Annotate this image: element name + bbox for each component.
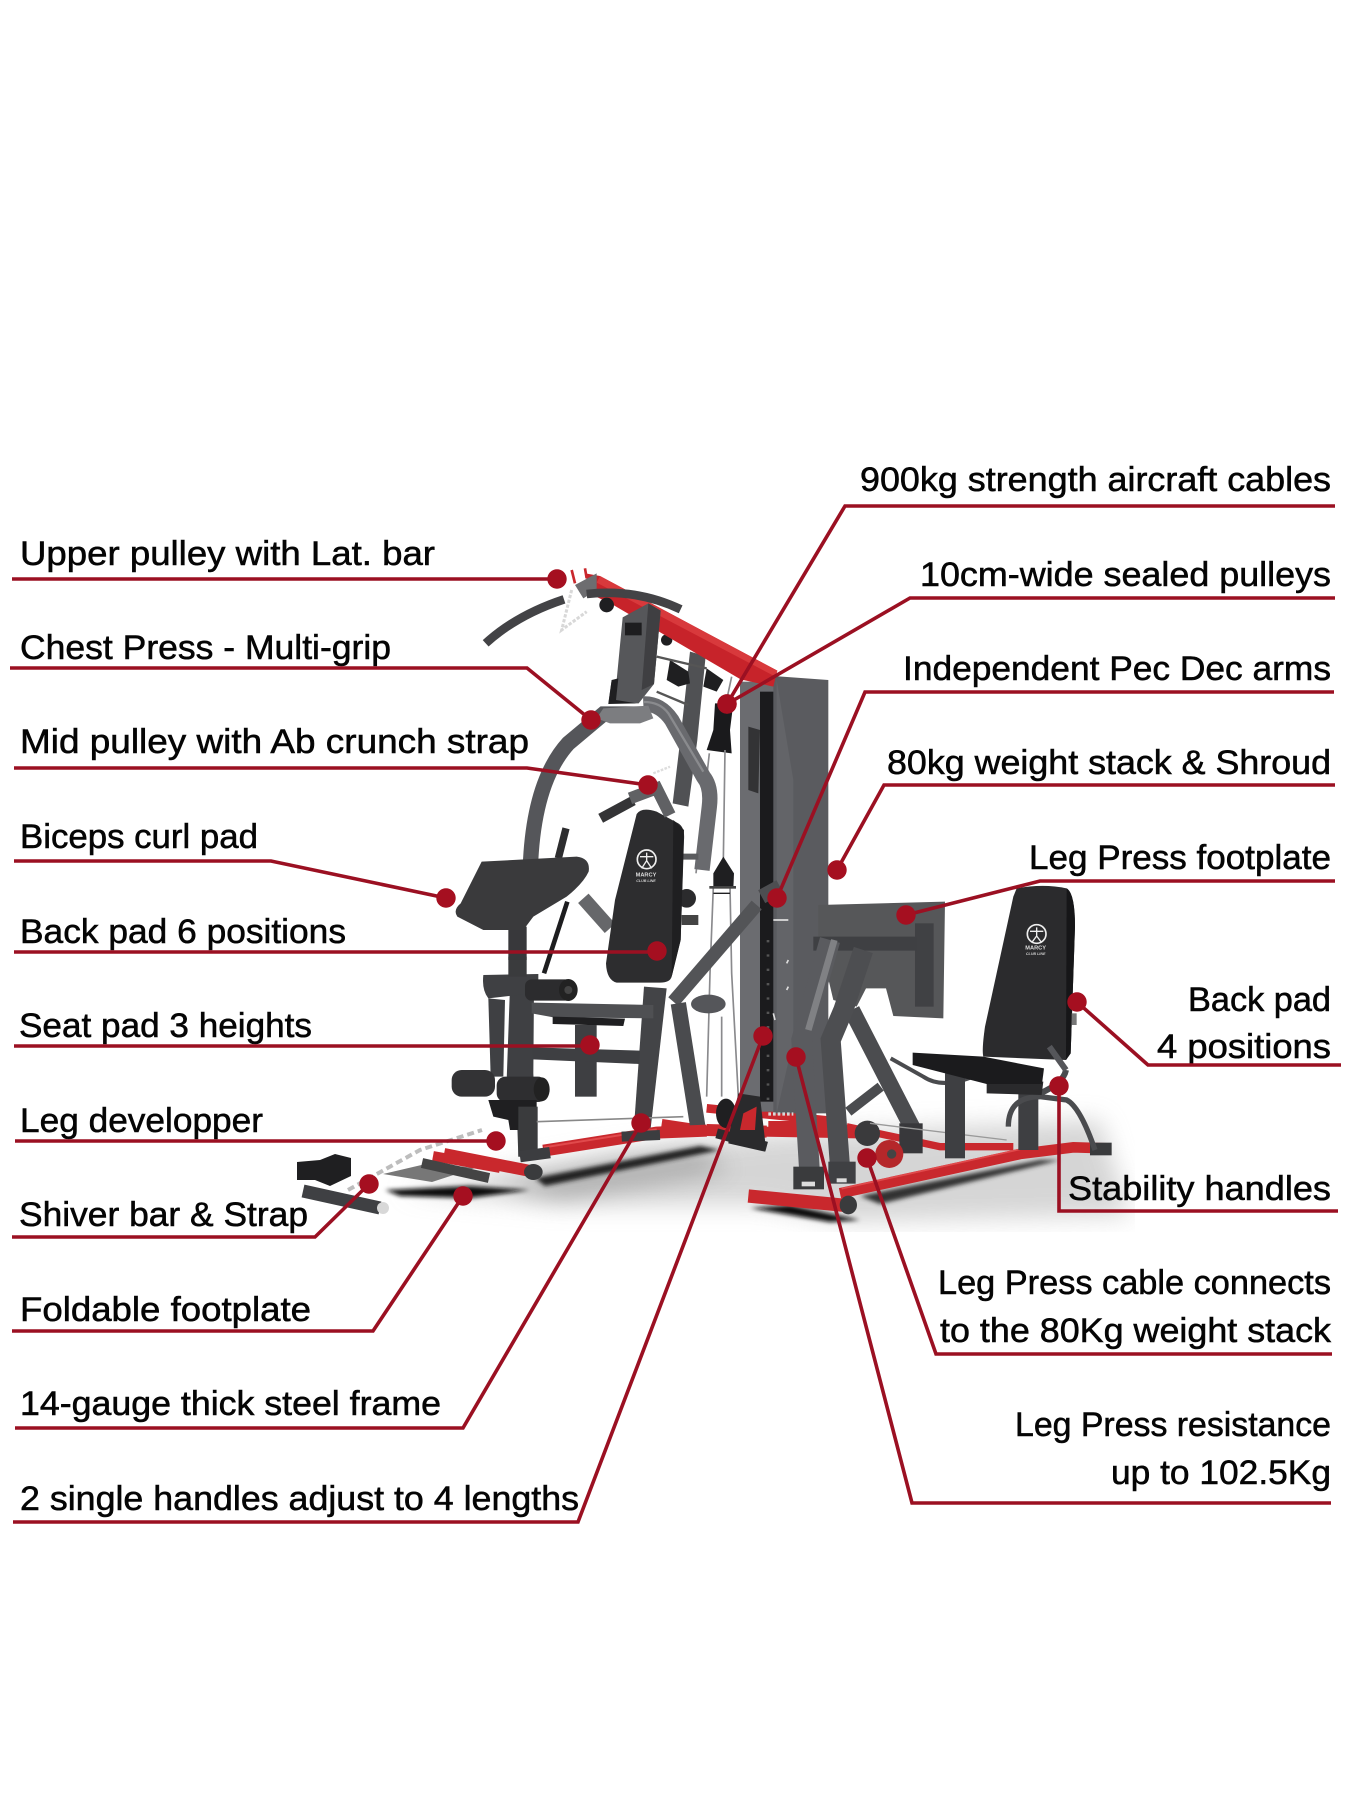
leader	[906, 881, 1335, 915]
base cable	[537, 1117, 683, 1122]
callout: seat pad	[14, 1007, 600, 1055]
front red base tube	[444, 1129, 767, 1180]
label: 80kg weight stack & Shroud	[887, 744, 1331, 782]
leader	[12, 1184, 369, 1237]
front bracket	[599, 598, 661, 704]
leader	[12, 577, 557, 581]
foldable footplate and accessories	[297, 1130, 500, 1214]
leader	[15, 1123, 641, 1428]
lat bar	[486, 590, 681, 643]
dot	[753, 1026, 773, 1046]
back pad support and brace	[673, 887, 780, 1130]
leader	[15, 1139, 496, 1143]
label: Chest Press - Multi-grip	[20, 629, 391, 667]
dot	[453, 1186, 473, 1206]
callout: sealed pulleys	[717, 556, 1335, 714]
leader	[867, 1158, 1332, 1354]
dot	[580, 1035, 600, 1055]
dot	[638, 775, 658, 795]
leader	[727, 598, 1335, 704]
label: Leg developper	[20, 1102, 263, 1140]
callout: leg press cable	[857, 1148, 1332, 1354]
dot	[827, 860, 847, 880]
dot	[1049, 1076, 1069, 1096]
dot	[359, 1174, 379, 1194]
chest back pad: CLUB LINE	[636, 879, 656, 883]
leg press back pad	[983, 886, 1077, 1070]
leader	[1059, 1086, 1338, 1211]
red top beam	[572, 568, 777, 687]
chest back pad	[606, 810, 684, 983]
leader	[777, 692, 1334, 898]
cables	[696, 677, 738, 1097]
dot	[717, 694, 737, 714]
callout: stability handles	[1049, 1076, 1338, 1211]
label: Back pad 6 positions	[20, 913, 346, 951]
stack base and handles	[716, 1093, 830, 1152]
dot	[436, 888, 456, 908]
leader	[14, 861, 446, 898]
leg press seat pad	[913, 1053, 1044, 1158]
weight stack shroud	[740, 676, 828, 1113]
callout: single handles	[13, 1026, 773, 1522]
mid pulley block	[709, 857, 736, 893]
label: Seat pad 3 heights	[19, 1007, 312, 1045]
callout: foldable footplate	[12, 1186, 473, 1331]
leader	[14, 768, 648, 785]
gym machine	[444, 568, 1112, 1214]
label line 2: up to 102.5Kg	[1111, 1454, 1331, 1492]
leader	[796, 1057, 1331, 1503]
callout: leg press resistance	[786, 1047, 1331, 1503]
callout: leg developper	[15, 1102, 506, 1151]
leader	[14, 1044, 590, 1048]
leader	[1077, 1002, 1341, 1065]
callout: steel frame	[15, 1113, 651, 1428]
label line 2: to the 80Kg weight stack	[940, 1312, 1332, 1350]
callout: back pad 6 positions	[14, 913, 667, 961]
leg press feet	[793, 1162, 856, 1189]
leg press strut and wheels	[847, 1010, 1013, 1153]
callout: back pad 4 positions	[1067, 981, 1341, 1066]
label: Foldable footplate	[20, 1291, 311, 1329]
callout: biceps curl pad	[14, 818, 456, 908]
main seat frame	[483, 957, 667, 1157]
tube behind curl pad	[558, 828, 566, 858]
chest back pad: MARCY	[636, 873, 657, 879]
dot	[547, 569, 567, 589]
dot	[1067, 992, 1087, 1012]
leg press arms	[802, 940, 863, 1168]
dot	[786, 1047, 806, 1067]
biceps curl pad	[456, 857, 589, 960]
dot	[631, 1113, 651, 1133]
label: 900kg strength aircraft cables	[860, 461, 1331, 499]
label: 2 single handles adjust to 4 lengths	[20, 1480, 579, 1518]
label: Shiver bar & Strap	[19, 1196, 308, 1234]
rear lat tower and pulleys	[631, 634, 733, 807]
leader	[727, 506, 1335, 704]
leader	[13, 1036, 763, 1522]
dot	[767, 888, 787, 908]
leader	[12, 1196, 463, 1331]
dot	[486, 1131, 506, 1151]
label line 2: 4 positions	[1157, 1028, 1331, 1066]
label: Leg Press cable connects	[938, 1264, 1331, 1302]
label: Stability handles	[1068, 1170, 1331, 1208]
leg press back pad: CLUB LINE	[1026, 952, 1046, 956]
callout: aircraft cables	[717, 461, 1335, 714]
callout: mid pulley	[14, 723, 658, 795]
chest press arms	[531, 702, 710, 870]
dot	[857, 1148, 877, 1168]
dot	[896, 905, 916, 925]
lower leg rollers	[452, 1070, 550, 1157]
leader	[10, 668, 591, 720]
dot	[717, 694, 737, 714]
leg press back pad: MARCY	[1025, 945, 1046, 951]
callout: leg press footplate	[896, 839, 1335, 925]
mid pulley handles	[601, 767, 670, 818]
callout: weight stack	[827, 744, 1335, 880]
leader	[837, 785, 1335, 870]
floor shadow	[385, 1120, 1130, 1222]
label: Upper pulley with Lat. bar	[20, 535, 435, 573]
rear red base tubes	[662, 1108, 857, 1133]
label: Independent Pec Dec arms	[903, 650, 1331, 688]
label: Mid pulley with Ab crunch strap	[20, 723, 529, 761]
leader	[14, 950, 657, 954]
label: Biceps curl pad	[20, 818, 258, 856]
callout: upper pulley	[12, 535, 567, 589]
label: Leg Press footplate	[1029, 839, 1331, 877]
stability handles	[1008, 1070, 1095, 1150]
leg press footplate	[813, 902, 945, 1018]
callout: pec dec arms	[767, 650, 1334, 908]
curl pad arm and strap	[544, 889, 698, 973]
label: 14-gauge thick steel frame	[20, 1385, 441, 1423]
callout: chest press	[10, 629, 601, 730]
upper leg roller	[525, 979, 578, 1001]
label: Back pad	[1188, 981, 1331, 1019]
label: 10cm-wide sealed pulleys	[920, 556, 1331, 594]
leg press red base	[748, 1093, 1112, 1214]
dot	[647, 941, 667, 961]
dot	[581, 710, 601, 730]
label: Leg Press resistance	[1015, 1406, 1331, 1444]
callout: shiver bar	[12, 1174, 379, 1237]
